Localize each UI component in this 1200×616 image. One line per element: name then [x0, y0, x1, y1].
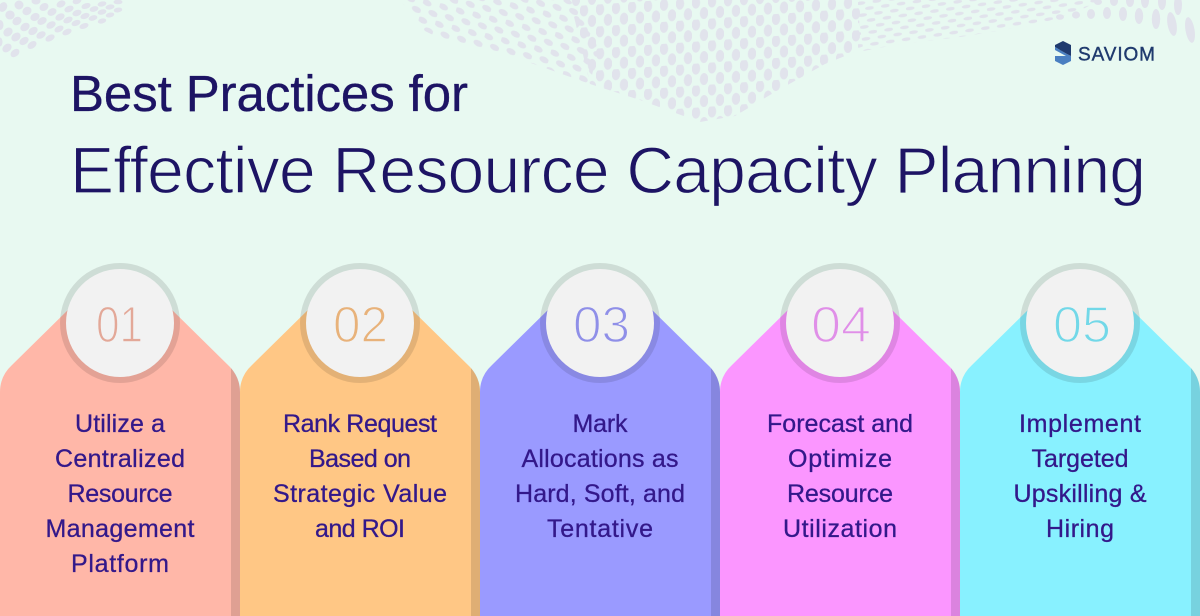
panel: step 02: Based on	[309, 445, 411, 473]
title	[70, 65, 1146, 207]
panel: step 04: Resource	[787, 480, 893, 508]
panel: step 04: Forecast and	[767, 410, 913, 438]
panel: step 01: Management	[46, 515, 195, 543]
title: Best Practices for	[70, 65, 468, 122]
panel: step 01	[0, 263, 240, 616]
panel: step 05	[960, 263, 1200, 616]
panel: step 02	[240, 263, 480, 616]
panel: step 05: Targeted	[1032, 445, 1128, 473]
title: Effective Resource Capacity Planning	[70, 133, 1146, 207]
panel: step 02: and ROI	[315, 515, 405, 543]
panel: step 01: Platform	[71, 550, 169, 578]
panel: step 02: Strategic Value	[273, 480, 447, 508]
panel: step 05: Upskilling &	[1014, 480, 1147, 508]
panel: step 05: Hiring	[1046, 515, 1114, 543]
panel: step 03: 03	[573, 296, 630, 353]
panel: step 01: Resource	[68, 480, 172, 508]
panel: step 03: Mark	[572, 410, 628, 438]
decorative dot wave: top centre and right	[400, 0, 1197, 122]
panel: step 03: Tentative	[547, 515, 653, 543]
panel: step 02: 02	[333, 296, 388, 353]
panel: step 03: Hard, Soft, and	[515, 480, 685, 508]
decorative dot wave: top left	[0, 0, 122, 58]
panel: step 04: Utilization	[783, 515, 897, 543]
panel: step 03: Allocations as	[522, 445, 678, 473]
logo: Saviom	[1055, 41, 1155, 66]
panel: step 03	[480, 263, 720, 616]
panel: step 02: Rank Request	[283, 410, 437, 438]
panel: step 05: 05	[1053, 296, 1111, 353]
panel: step 01: 01	[96, 296, 143, 353]
panel: step 01: Centralized	[55, 445, 185, 473]
panel: step 04	[720, 263, 960, 616]
panel: step 05: Implement	[1019, 410, 1141, 438]
panel: step 04: Optimize	[788, 445, 892, 473]
panel: step 01: Utilize a	[75, 410, 165, 438]
panel: step 04: 04	[811, 296, 871, 353]
logo: Saviom: SAVIOM	[1078, 44, 1155, 66]
